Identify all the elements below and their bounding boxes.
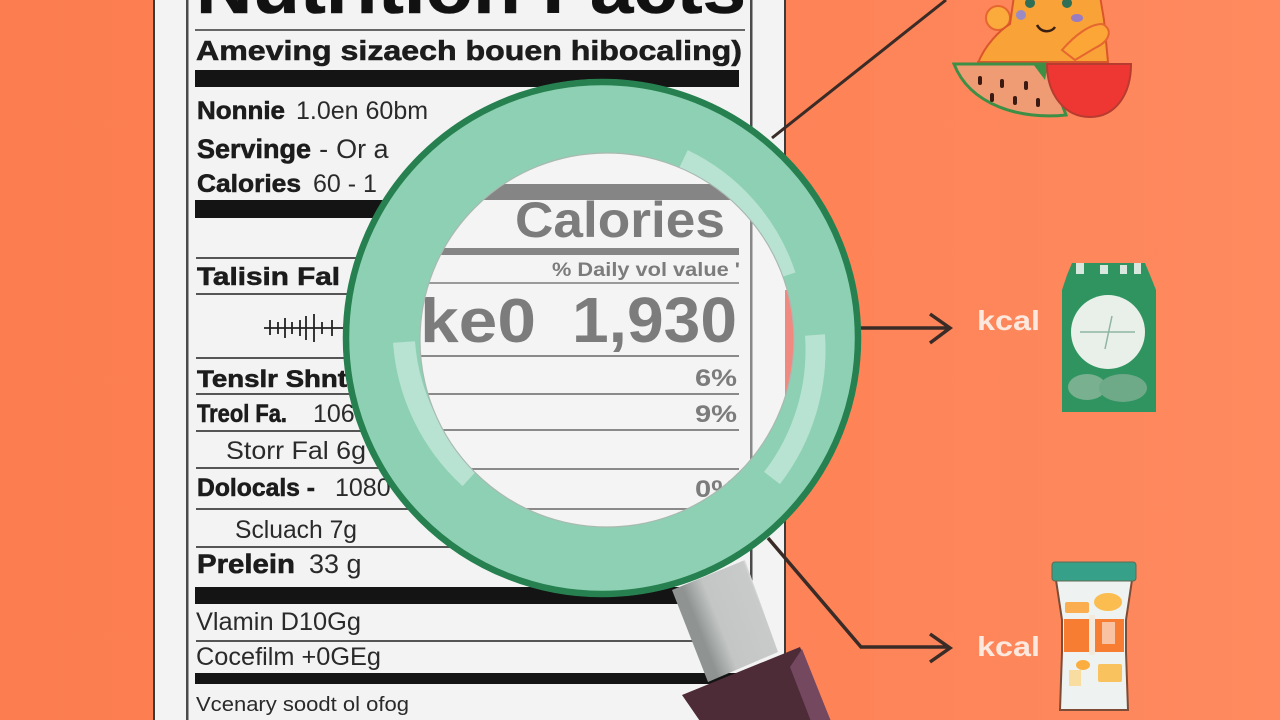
row: Dolocals: Dolocals - 1080 (197, 474, 391, 502)
icon: fruit character (954, 0, 1131, 117)
lens highlight: lower left (404, 342, 470, 478)
magnified view (421, 168, 794, 510)
icon: tomato bowl (1047, 64, 1131, 117)
icon: watermelon slice (954, 64, 1066, 116)
percent 9: 9% (695, 401, 737, 428)
row: Tenslr Shnt: Tenslr Shnt (197, 366, 347, 393)
percent 0: 0% (695, 476, 737, 503)
squiggle text (264, 314, 345, 342)
label: kcal middle: kcal (977, 305, 1040, 336)
magnified Calories heading: Calories (515, 192, 725, 248)
row: Scluach: Scluach 7g (235, 516, 357, 544)
arrow: top connector (772, 0, 946, 138)
magnifier handle: silver shaft (672, 560, 778, 682)
magnified daily value: % Daily vol value ' (552, 260, 740, 281)
footnote: Vcenary soodt ol ofog (196, 694, 409, 716)
row: Vitamin: Vlamin D10Gg (196, 608, 361, 636)
magnified kcal value: ke0 (420, 287, 536, 356)
row: Calories: Calories 60 - 1 (197, 170, 377, 198)
row: Storr Fal: Storr Fal 6g (226, 437, 366, 465)
row: Treol Fa: Treol Fa. 106 (197, 400, 355, 428)
arrow: bottom connector (768, 538, 950, 662)
icon: snack jar (1052, 562, 1136, 710)
row: Protein: Prelein 33 g (197, 549, 362, 579)
lens inner edge (420, 153, 794, 527)
serving size heading: Ameving sizaech bouen hibocaling) (196, 35, 742, 66)
lens highlight: lower right (772, 335, 816, 478)
icon: green package (1062, 263, 1156, 412)
magnifier lens ring (343, 79, 861, 597)
row: Nonnie: Nonnie 1.0en 60bm (197, 97, 428, 125)
row: Servinge: Servinge - Or a (197, 134, 390, 164)
magnified number: 1,930 (572, 284, 737, 356)
row: Talisin Fal: Talisin Fal (197, 263, 340, 291)
row: Cocofin: Cocefilm +0GEg (196, 643, 381, 671)
lens highlight: upper right (683, 160, 785, 276)
magnifier handle: grip (682, 647, 832, 720)
percent 6: 6% (695, 365, 737, 392)
label: kcal bottom: kcal (977, 631, 1040, 662)
arrow: middle connector (858, 314, 950, 343)
panel: nutrition facts label (154, 0, 785, 720)
